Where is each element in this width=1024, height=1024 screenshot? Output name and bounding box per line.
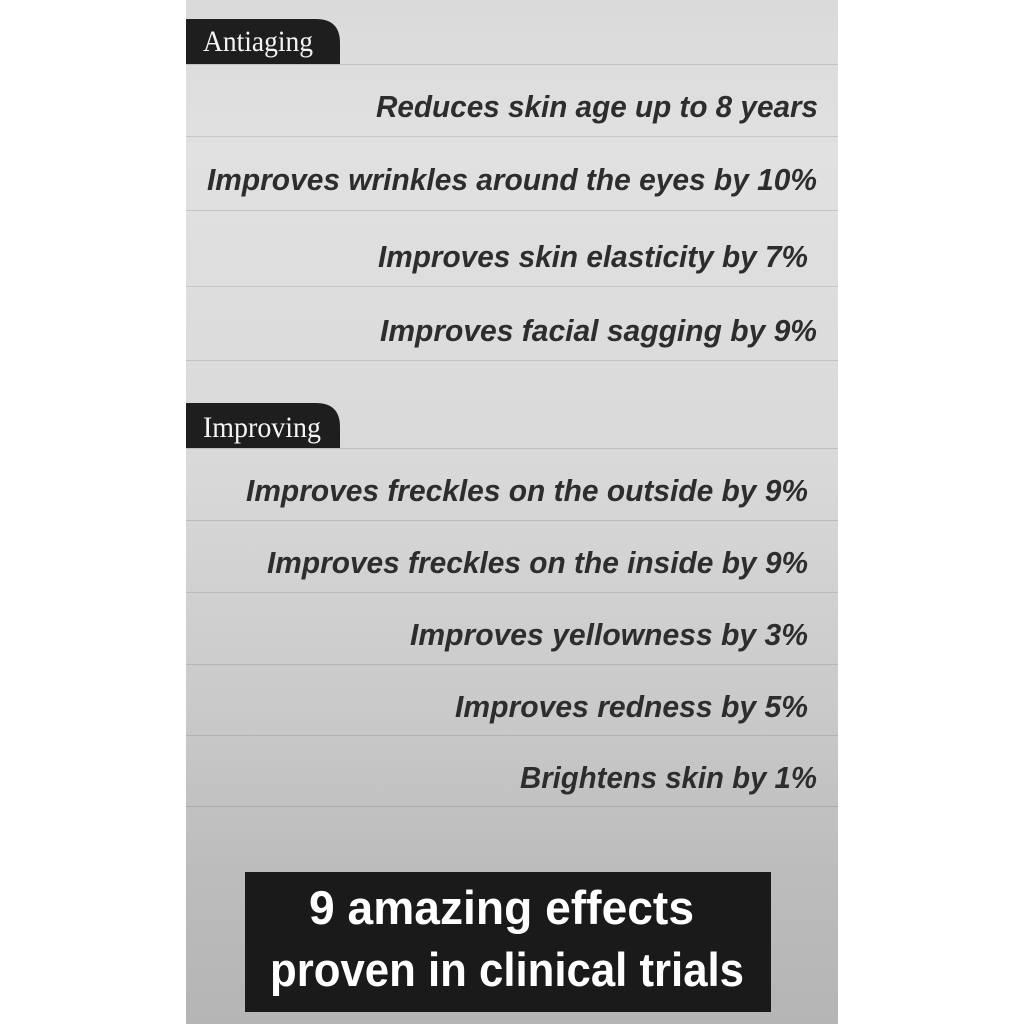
text: brightens: Brightens skin by 1% bbox=[520, 760, 817, 795]
heading tab: Antiaging bbox=[186, 19, 340, 64]
text: sagging: Improves facial sagging by 9% bbox=[380, 313, 817, 348]
heading tab: Improving bbox=[186, 403, 340, 448]
heading tab: Antiaging: Antiaging bbox=[203, 25, 313, 58]
heading tab: Improving: Improving bbox=[203, 411, 321, 444]
text: wrinkles: Improves wrinkles around the eyes by 10% bbox=[207, 162, 817, 197]
text: skin age: Reduces skin age up to 8 years bbox=[376, 89, 818, 124]
text: freckles inside: Improves freckles on the inside by 9% bbox=[267, 545, 808, 580]
callout: clinical trials: 9 amazing effects bbox=[309, 881, 694, 934]
text: elasticity: Improves skin elasticity by 7% bbox=[378, 239, 808, 274]
text: yellowness: Improves yellowness by 3% bbox=[410, 617, 808, 652]
callout: clinical trials bbox=[245, 872, 771, 1012]
panel: background bbox=[186, 0, 838, 1024]
panel: antiaging section bbox=[186, 19, 818, 348]
panel: improving section bbox=[186, 403, 817, 795]
text: freckles outside: Improves freckles on the outside by 9% bbox=[246, 473, 808, 508]
callout: clinical trials: proven in clinical trials bbox=[270, 943, 744, 996]
text: redness: Improves redness by 5% bbox=[455, 689, 808, 724]
